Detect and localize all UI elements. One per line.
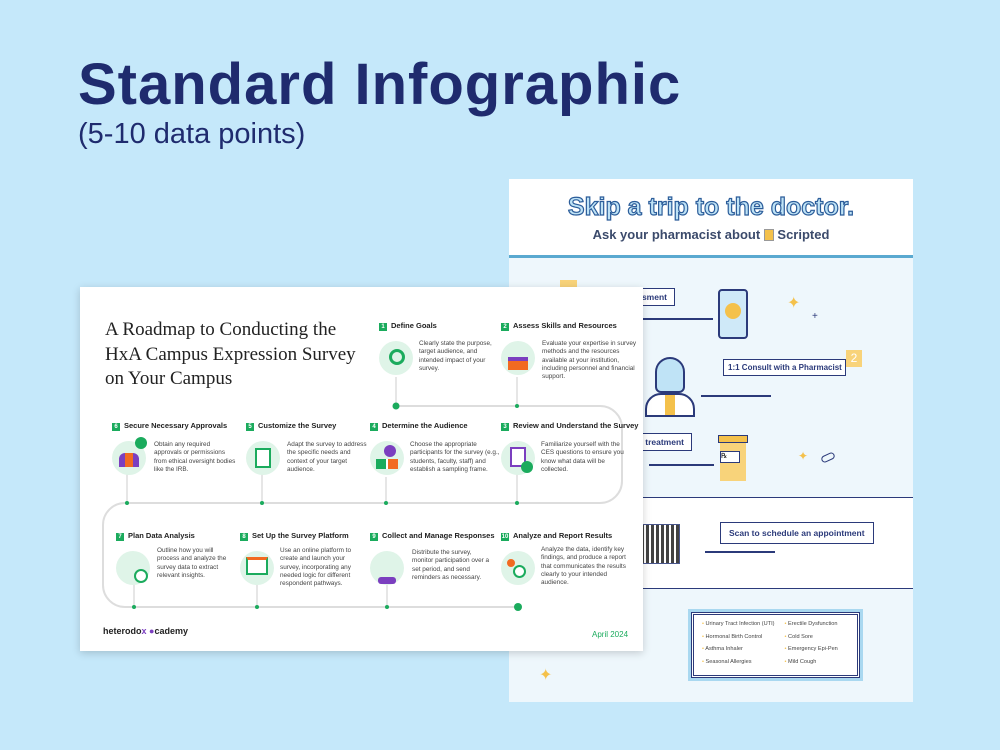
step 6: [112, 421, 236, 475]
poster title: Skip a trip to the doctor.: [568, 193, 854, 221]
step 10: Analyze and Report Results: [513, 531, 612, 540]
panel: pharmacy poster: +: [812, 311, 818, 322]
step 5: Adapt the survey to address the specific needs and context of your target audience.: [287, 441, 367, 473]
connector 3: [649, 464, 714, 466]
step 8: 8: [242, 534, 246, 540]
step 2 badge: [846, 350, 862, 367]
step 7: Plan Data Analysis: [128, 531, 195, 540]
step 9: Distribute the survey, monitor participation over a set period, and send reminders as necessary.: [412, 549, 489, 581]
label: treatment: [586, 433, 692, 451]
step 4: 4: [372, 424, 376, 430]
step 2: Evaluate your expertise in survey methods and the resources available at your institution, including personnel and financial support.: [542, 340, 636, 380]
step 8: Set Up the Survey Platform: [252, 531, 349, 540]
roadmap title: A Roadmap to Conducting the: [105, 319, 336, 340]
step 8: Use an online platform to create and launch your survey, incorporating any needed logic for different respondent pathways.: [280, 547, 351, 587]
step 4: Determine the Audience: [382, 421, 468, 430]
label: assessment: [590, 288, 675, 306]
step 10: [501, 531, 626, 586]
step 7: [116, 531, 226, 585]
step 2 badge: 2: [851, 351, 857, 365]
track: [102, 377, 623, 611]
step 1 badge: [560, 280, 577, 297]
step 1: Define Goals: [391, 321, 437, 330]
step 4: Choose the appropriate participants for the survey (e.g., students, faculty, staff) and establish a sampling frame.: [410, 441, 500, 473]
label: scan: Scan to schedule an appointment: [729, 528, 865, 538]
step 2: Assess Skills and Resources: [513, 321, 617, 330]
step 1: 1: [381, 324, 385, 330]
panel: pharmacy poster: ✦: [798, 449, 808, 463]
title: Standard Infographic: [78, 52, 681, 117]
logo: heterodox ●cademy: [103, 626, 188, 636]
roadmap title: on Your Campus: [105, 368, 232, 389]
step 5: 5: [248, 424, 252, 430]
conditions list: Erectile Dysfunction: [788, 621, 837, 627]
step 3: Familiarize yourself with the CES questions to ensure you know what data will be collected.: [541, 441, 624, 473]
white band: [509, 497, 913, 589]
step 10: Analyze the data, identify key findings, and produce a report that communicates the results clearly to your intended audience.: [541, 546, 626, 586]
step 8: [240, 531, 351, 587]
step 6: Obtain any required approvals or permissions from ethical oversight bodies like the IRB.: [154, 441, 235, 473]
label: consult: 1:1 Consult with a Pharmacist: [728, 363, 842, 372]
connector 4: [705, 551, 775, 552]
step 6: Secure Necessary Approvals: [124, 421, 227, 430]
poster subtitle: Ask your pharmacist about Scripted: [593, 227, 829, 242]
connector 1: [639, 318, 713, 320]
step 2: [501, 321, 636, 380]
conditions list: Mild Cough: [788, 658, 816, 664]
step 3: Review and Understand the Survey: [513, 421, 638, 430]
step 4: [370, 421, 500, 475]
roadmap title: [105, 319, 356, 389]
icon: sparkle: ✦: [787, 295, 800, 312]
step 9: 9: [372, 534, 376, 540]
conditions list: Cold Sore: [788, 634, 813, 640]
icon: pharmacist: [645, 357, 695, 417]
step 5: Customize the Survey: [258, 421, 336, 430]
label: consult: [723, 359, 846, 376]
connector 2: [701, 395, 771, 396]
step 6: 6: [114, 424, 118, 430]
icon: phone: [718, 289, 748, 339]
conditions list: Hormonal Birth Control: [706, 634, 762, 640]
label: treatment: Diagnosis & treatment: [594, 437, 684, 447]
label: scan: [720, 522, 874, 544]
step 5: [246, 421, 367, 475]
conditions list: Urinary Tract Infection (UTI): [706, 621, 775, 627]
step 7: Outline how you will process and analyze the survey data to extract relevant insights.: [157, 547, 226, 579]
roadmap title: HxA Campus Expression Survey: [105, 344, 356, 364]
icon: pill bottle: ℞: [721, 453, 727, 460]
step 3: 3: [503, 424, 507, 430]
icon: pill: [820, 451, 836, 464]
step 3: [501, 421, 638, 475]
panel: pharmacy poster: ✦: [539, 667, 552, 684]
date: April 2024: [592, 630, 628, 639]
subtitle: (5-10 data points): [78, 118, 305, 150]
icon: qr code: [640, 524, 680, 564]
conditions list: [691, 612, 860, 678]
conditions list: Seasonal Allergies: [706, 658, 752, 664]
conditions list: Asthma Inhaler: [705, 646, 743, 652]
step 9: [370, 531, 495, 585]
step 10: 10: [502, 534, 508, 540]
panel: pharmacy poster: [509, 179, 913, 702]
step 1: Clearly state the purpose, target audience, and intended impact of your survey.: [419, 340, 492, 372]
poster header: [509, 179, 913, 258]
icon: pill bottle: [718, 435, 748, 481]
conditions list: Emergency Epi-Pen: [788, 646, 838, 652]
step 1: [379, 321, 492, 375]
panel: roadmap card: [80, 287, 643, 651]
step 7: 7: [118, 534, 122, 540]
step 2: 2: [503, 324, 507, 330]
label: assessment: Self-Assessment: [598, 292, 667, 302]
step 9: Collect and Manage Responses: [382, 531, 495, 540]
